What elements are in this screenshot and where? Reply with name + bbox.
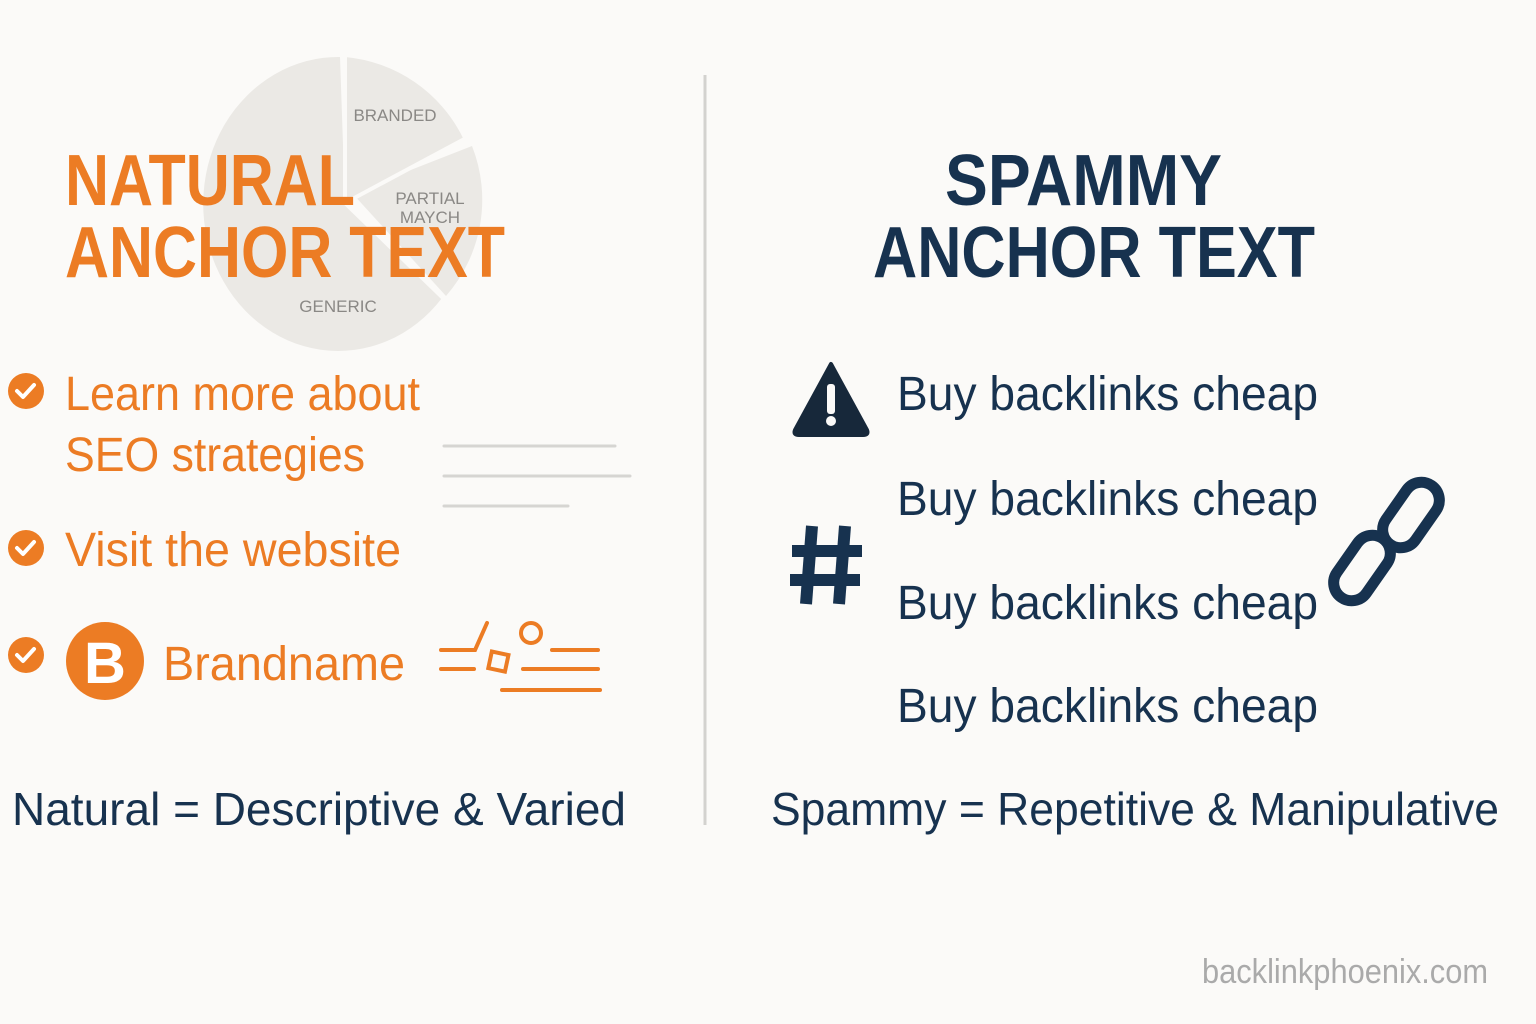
- title: natural anchor text: [65, 141, 505, 293]
- title: spammy anchor text: [873, 141, 1315, 293]
- pie chart: [203, 55, 482, 351]
- spammy list: Buy backlinks cheap: [897, 368, 1318, 421]
- spammy list: Buy backlinks cheap: [897, 473, 1318, 526]
- item: learn more: SEO strategies: [65, 429, 365, 482]
- title: spammy anchor text: SPAMMY: [945, 141, 1222, 221]
- item: brandname: [8, 622, 405, 700]
- spammy list: [897, 368, 1318, 733]
- icon: orange doodle: [441, 623, 600, 690]
- divider: [704, 75, 706, 825]
- item: brandname: Brandname: [163, 638, 405, 691]
- icon: chain: [1327, 475, 1446, 608]
- item: visit: Visit the website: [65, 524, 401, 577]
- pie chart: PARTIAL: [395, 189, 465, 208]
- item: learn more: Learn more about: [65, 368, 420, 421]
- spammy list: Buy backlinks cheap: [897, 680, 1318, 733]
- spammy list: Buy backlinks cheap: [897, 577, 1318, 630]
- title: natural anchor text: ANCHOR TEXT: [65, 213, 505, 293]
- footer: spammy summary: Spammy = Repetitive & Manipulative: [771, 783, 1499, 835]
- natural list: [8, 368, 420, 700]
- title: spammy anchor text: ANCHOR TEXT: [873, 213, 1315, 293]
- footer: natural summary: Natural = Descriptive & Varied: [12, 783, 626, 835]
- pie chart: GENERIC: [299, 297, 377, 316]
- watermark: backlinkphoenix.com: [1202, 953, 1488, 991]
- pie chart: MAYCH: [400, 208, 460, 227]
- item: brandname: B: [84, 631, 126, 696]
- icon: hash: [790, 526, 862, 604]
- pie chart: BRANDED: [353, 106, 437, 125]
- item: learn more: [8, 368, 420, 482]
- title: natural anchor text: NATURAL: [65, 141, 355, 221]
- decorative text lines: [444, 446, 630, 506]
- icon: warning: [794, 364, 868, 435]
